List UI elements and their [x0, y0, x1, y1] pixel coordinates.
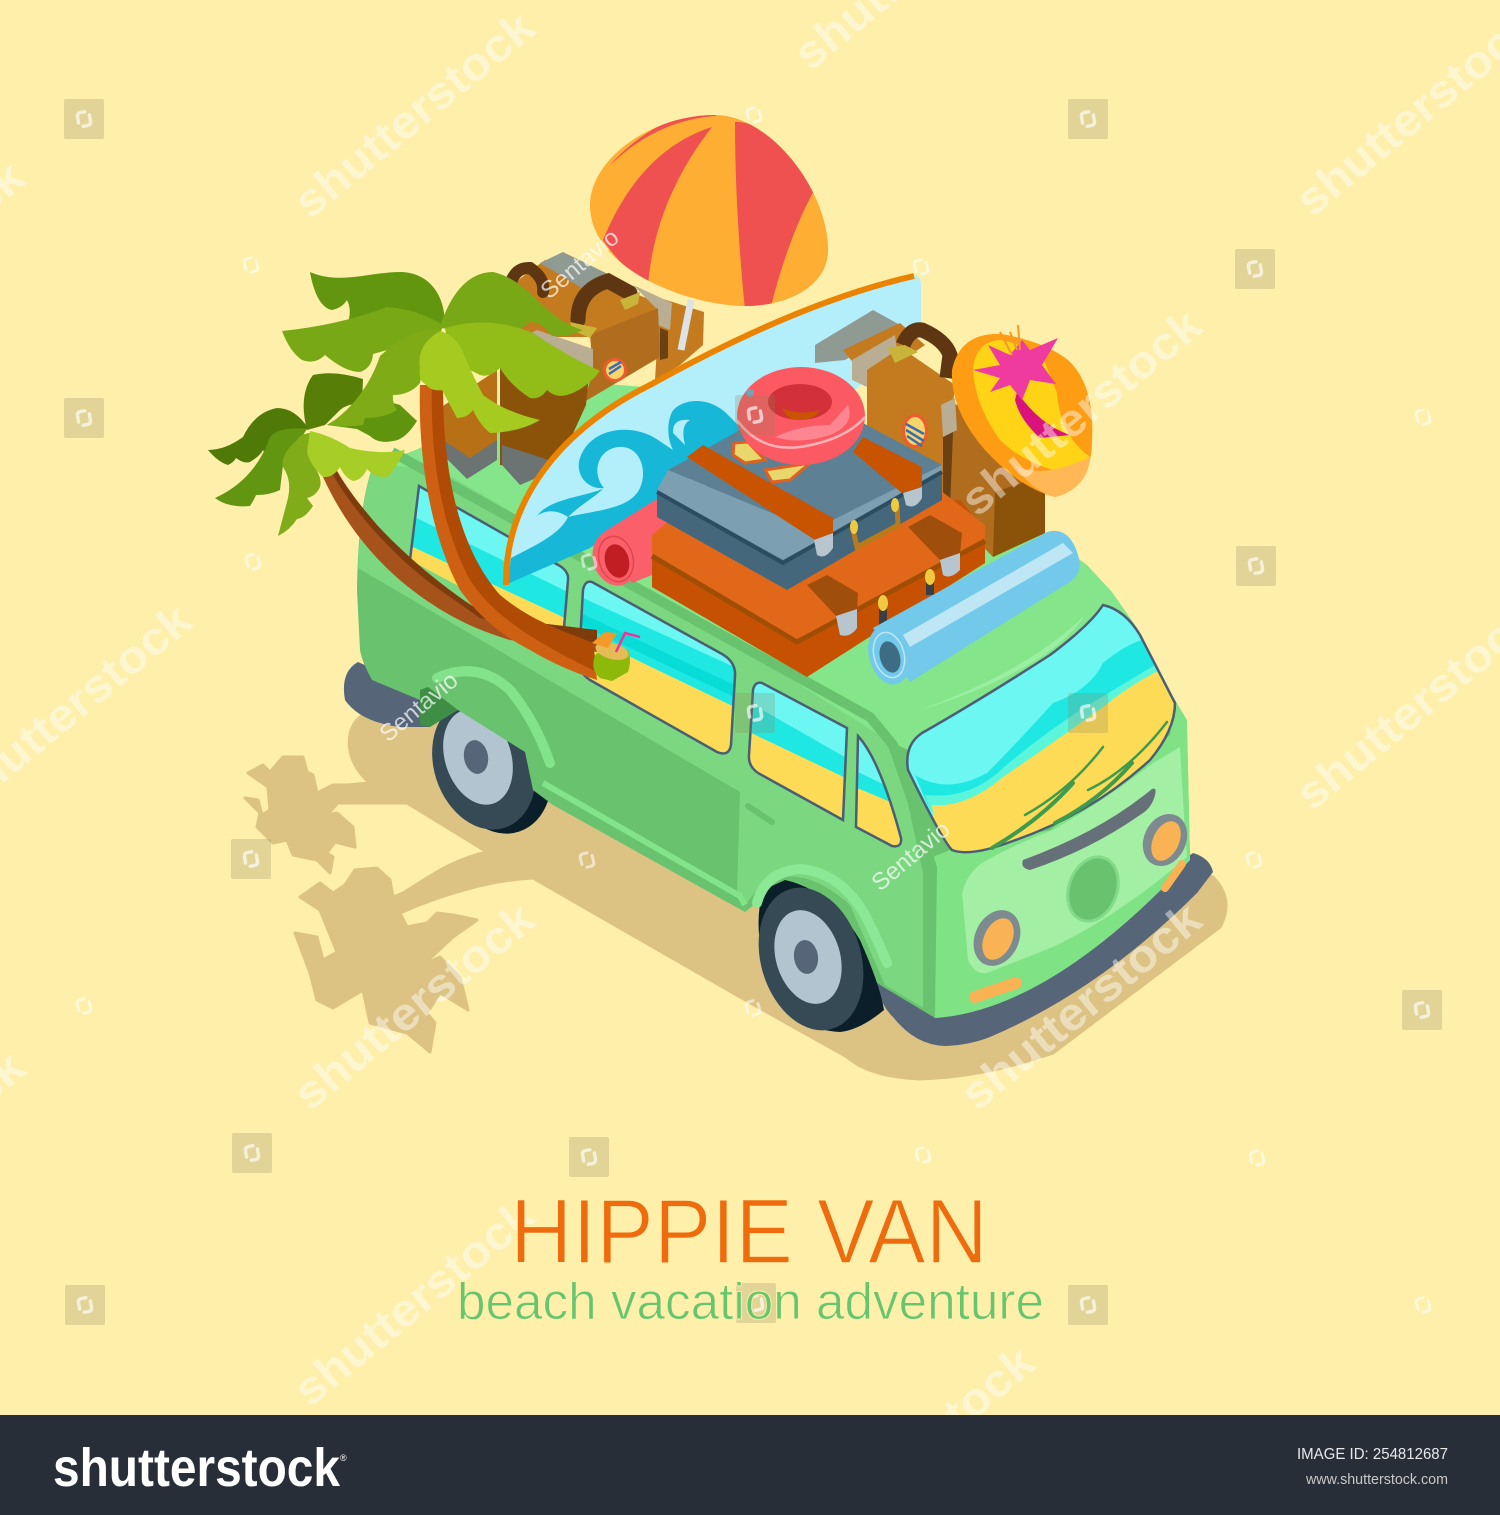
front wheel arch highlight: [757, 869, 887, 963]
bright leaf: [307, 431, 405, 481]
strap left: [807, 575, 858, 617]
orange lid: [652, 490, 985, 640]
latches: [883, 577, 930, 625]
lid seam: [652, 541, 985, 642]
blue suitcase: [657, 423, 942, 590]
watermark author tags: Sentavio: [536, 224, 624, 305]
canopy stripes: [603, 110, 820, 310]
far right stub case: [655, 298, 704, 380]
front bumper: [875, 853, 1213, 1046]
lower left brown case: [443, 370, 497, 462]
rear bumper: [344, 662, 430, 727]
small palm leaves: [208, 373, 417, 536]
board deck: [503, 275, 921, 585]
handle clips: [570, 292, 640, 338]
wave second hollow: [673, 420, 690, 445]
van and palm shadows on sand: [245, 715, 1226, 1079]
left leaf: [282, 307, 443, 372]
red rolled mat: [587, 497, 690, 591]
board orange rim: [506, 276, 914, 585]
shadow: big palm: [295, 868, 477, 1052]
case front face: [867, 345, 955, 500]
hat crown: [973, 340, 1090, 470]
lid strip gray: [515, 337, 573, 372]
gray top: [540, 252, 610, 290]
blue rolled mat: [862, 531, 1080, 689]
canopy: [590, 115, 828, 306]
blue lid band: [657, 465, 942, 560]
beach umbrella: [590, 110, 828, 310]
beige corner: [633, 285, 672, 330]
roof gutter: [392, 452, 912, 800]
dark leaf: [208, 408, 308, 465]
van body: [357, 380, 1190, 1018]
subtitle: beach vacation adventure: [457, 1273, 1044, 1331]
door panel: [720, 790, 737, 890]
watermark wordmarks: shutterstock: [950, 892, 1211, 1120]
flower petals: [973, 338, 1058, 400]
back left leaf: [310, 272, 445, 330]
clip front: [814, 533, 833, 556]
window: quarter: [857, 740, 900, 846]
front vent oval: [1059, 850, 1127, 928]
windows with beach scene: [400, 480, 1185, 870]
luggage tags: [733, 442, 810, 482]
strap clip right: [940, 553, 960, 577]
back suitcases left: [443, 252, 704, 485]
front corner pillar: [905, 790, 937, 1016]
case top brown: [843, 323, 925, 375]
left headlight: [965, 902, 1029, 974]
big palm leaves: [282, 272, 600, 433]
orange suitcase: [652, 490, 985, 677]
red stripe top: [610, 115, 716, 165]
watermark author tags: Sentavio: [867, 816, 955, 897]
orange body: [652, 500, 985, 677]
watermark stamps: [64, 99, 1442, 1325]
handle clip: [888, 345, 918, 363]
handle back: [510, 268, 543, 292]
window: middle side: [582, 582, 734, 752]
sticker: [902, 414, 928, 448]
dark strip: [660, 328, 668, 360]
front face: [925, 695, 1190, 1018]
watermark wordmarks: shutterstock: [950, 298, 1211, 526]
case gray top: [815, 310, 902, 363]
strip dark between: [943, 430, 953, 510]
front mask: [962, 747, 1187, 973]
body side upper band: [358, 440, 935, 1015]
shadow: van body: [338, 715, 1226, 1079]
dark leaf upper: [304, 373, 363, 430]
watermark wordmarks: shutterstock: [283, 1188, 544, 1416]
wave curl hollow: [568, 447, 643, 517]
title: HIPPIE VAN: [510, 1181, 988, 1283]
window: front side: [750, 684, 846, 818]
watermark wordmarks: shutterstock: [283, 0, 544, 228]
upper right leaf: [327, 402, 417, 442]
latches: [850, 520, 858, 534]
lower dark case: [500, 340, 590, 470]
footer image id: IMAGE ID: 254812687: [1297, 1446, 1448, 1463]
strap clip left: [836, 609, 857, 636]
sun hat with flower: [952, 325, 1092, 497]
handle: [853, 506, 898, 547]
faint watermark marks: [76, 107, 1431, 1313]
windshield: [908, 606, 1174, 851]
strap right: [908, 515, 962, 560]
footer logo: shutterstock: [53, 1438, 341, 1498]
beige clip: [941, 398, 957, 437]
right headlight: [1135, 807, 1195, 873]
umbrella pole: [681, 300, 691, 350]
footer registered mark: ®: [340, 1453, 347, 1463]
handle: [903, 330, 950, 378]
body side lower: [357, 440, 1190, 1018]
lower leaf: [278, 433, 321, 536]
right leaf: [445, 323, 600, 398]
clip rear: [903, 487, 922, 506]
lower gray feet: [443, 440, 497, 479]
board wave: [507, 401, 745, 584]
shadow: small palm: [245, 757, 370, 873]
upper case lid: [505, 260, 665, 337]
blue top: [668, 423, 942, 530]
window: rear side: [412, 488, 567, 626]
flower stem: [1015, 392, 1070, 438]
coconut drink: [592, 632, 640, 681]
red stripe left: [603, 127, 712, 285]
watermark author tags: Sentavio: [375, 667, 463, 748]
right back suitcases: [815, 310, 1045, 557]
watermark stamp marks: [77, 111, 1429, 1313]
hat brim: [952, 334, 1092, 497]
blue body: [657, 467, 942, 590]
big palm trunk: [420, 385, 597, 680]
left down leaf: [328, 330, 440, 426]
lid strip beige: [523, 330, 593, 368]
front grille bar: [1022, 789, 1156, 870]
second case dark side: [993, 475, 1045, 557]
rear arch shade: [420, 687, 458, 727]
turn signal right: [1165, 864, 1182, 888]
upper case face: [584, 308, 660, 402]
roof gloss: [915, 615, 1085, 712]
footer bar: [0, 1415, 1500, 1515]
watermark wordmarks: shutterstock: [283, 892, 544, 1120]
handle front: [578, 281, 630, 320]
door handle: [748, 806, 772, 822]
sill highlight: [543, 783, 745, 905]
front leaf: [419, 331, 540, 433]
beige corner: [852, 335, 897, 387]
footer site url: www.shutterstock.com: [1305, 1471, 1448, 1488]
strap rear: [853, 437, 922, 493]
mid leaf: [215, 428, 307, 506]
top right leaf: [440, 272, 583, 336]
second case face: [943, 400, 1045, 557]
surfboard: [503, 275, 921, 585]
windshield wipers: [992, 722, 1167, 848]
sticker: [603, 358, 627, 382]
small palm trunk: [323, 471, 597, 652]
rear wheel: [416, 685, 568, 848]
red stripe right: [735, 122, 820, 310]
seam: [657, 472, 942, 563]
front wheel: [742, 875, 884, 1043]
watermark author tags: [375, 224, 955, 897]
flower pistils: [1000, 325, 1020, 355]
rear arch highlight: [437, 671, 550, 763]
swim ring: [737, 367, 865, 465]
strap front: [687, 445, 833, 540]
roof: [385, 380, 1135, 750]
hat lighter band: [1015, 457, 1090, 497]
turn signal left: [975, 983, 1016, 997]
